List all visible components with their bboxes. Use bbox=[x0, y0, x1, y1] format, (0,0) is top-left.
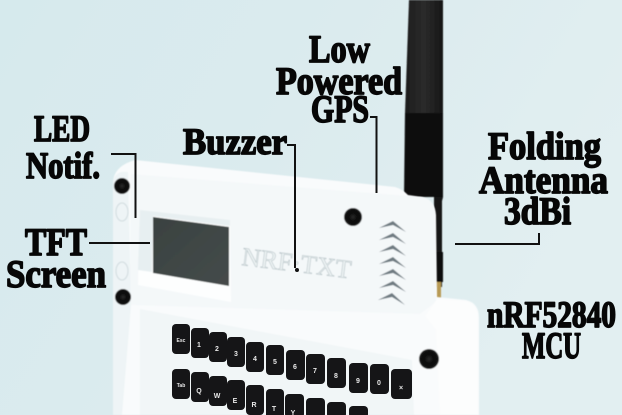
LED rings bbox=[116, 203, 128, 280]
key legends: 3 bbox=[234, 351, 238, 358]
key legends: 1 bbox=[197, 342, 201, 349]
label: LED Notif.: Notif. bbox=[26, 146, 100, 187]
leader: TFT Screen bbox=[89, 242, 150, 244]
key legends: T bbox=[272, 406, 277, 413]
key legends: 2 bbox=[215, 346, 219, 353]
side strip bbox=[113, 172, 131, 415]
screen bbox=[153, 217, 229, 286]
leader: Buzzer bbox=[287, 145, 299, 272]
key legends: Q bbox=[196, 388, 202, 395]
leader: GPS bbox=[370, 117, 376, 193]
key legends: 7 bbox=[313, 368, 317, 375]
label: TFT Screen bbox=[6, 221, 106, 296]
screen recess bbox=[138, 210, 231, 302]
lower right block shading bbox=[425, 299, 478, 415]
key legends: R bbox=[251, 402, 257, 409]
key legends: 9 bbox=[356, 378, 360, 385]
key legends: Tab bbox=[177, 383, 185, 389]
label: TFT Screen: Screen bbox=[6, 253, 106, 296]
antenna bbox=[404, 0, 443, 302]
label: Folding Antenna 3dBi: Antenna bbox=[479, 159, 608, 202]
keyboard recess bbox=[140, 309, 414, 415]
key legends: × bbox=[399, 385, 403, 392]
label: Folding Antenna 3dBi bbox=[479, 125, 608, 233]
recess shade bbox=[138, 210, 230, 272]
label: LED Notif. bbox=[26, 109, 100, 187]
screws bbox=[114, 178, 439, 369]
key legends: 6 bbox=[293, 364, 297, 371]
vent slots bbox=[378, 221, 406, 305]
key legends: 5 bbox=[273, 359, 277, 366]
device body bbox=[113, 160, 479, 415]
front plate shading bbox=[130, 174, 436, 314]
key legends bbox=[177, 338, 403, 415]
label: nRF52840 MCU bbox=[487, 295, 616, 367]
label: Low Powered GPS bbox=[276, 28, 402, 131]
key legends: 4 bbox=[253, 356, 257, 363]
key legends: Esc bbox=[177, 338, 186, 344]
keycaps row 1 bbox=[172, 324, 412, 399]
label: Folding Antenna 3dBi: 3dBi bbox=[504, 190, 571, 233]
leader: Folding Antenna bbox=[455, 233, 539, 244]
keycaps row 2 bbox=[172, 369, 368, 415]
logo text: NRF·TXT bbox=[240, 242, 353, 284]
label: Low Powered GPS: Powered bbox=[276, 60, 402, 103]
leader: LED Notif. bbox=[111, 154, 136, 218]
label: TFT Screen: TFT bbox=[25, 221, 87, 264]
label: LED Notif.: LED bbox=[34, 109, 90, 150]
label: Buzzer: Buzzer bbox=[183, 122, 287, 163]
white enclosure bbox=[113, 160, 479, 415]
label: Low Powered GPS: GPS bbox=[311, 88, 369, 131]
key legends: 8 bbox=[334, 373, 338, 380]
key legends: E bbox=[233, 398, 238, 405]
label: nRF52840 MCU: MCU bbox=[522, 326, 581, 367]
keyboard bbox=[172, 324, 412, 415]
key legends: W bbox=[214, 393, 221, 400]
label: Folding Antenna 3dBi: Folding bbox=[488, 125, 601, 168]
label: Low Powered GPS: Low bbox=[309, 28, 370, 71]
key legends: 0 bbox=[377, 380, 381, 387]
